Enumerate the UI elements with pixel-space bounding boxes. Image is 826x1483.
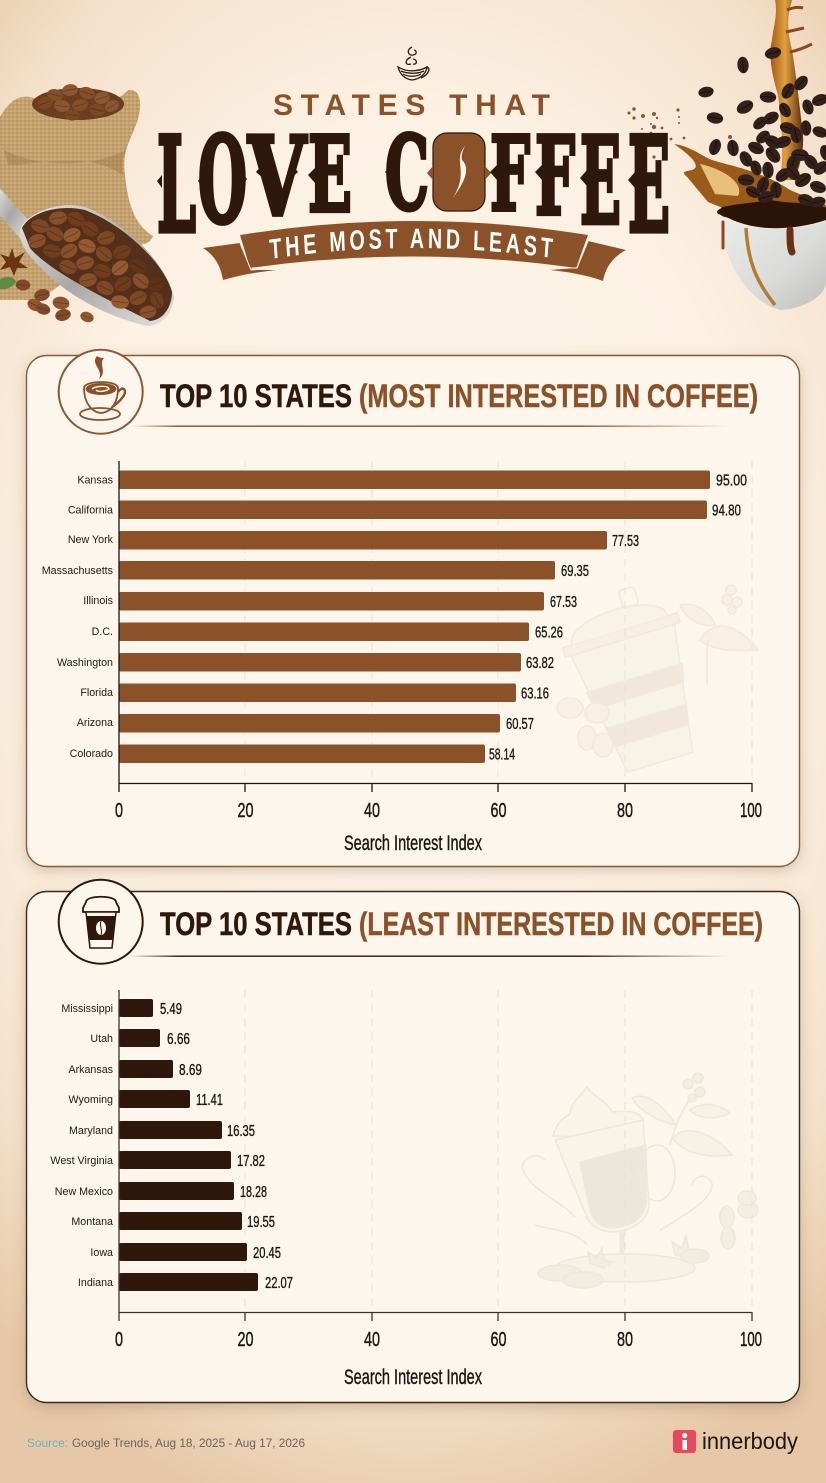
axis tick labels	[115, 800, 762, 822]
watermark: latte glass	[523, 1073, 758, 1288]
bars	[119, 999, 258, 1291]
state labels: New York	[68, 534, 114, 546]
value labels: 94.80	[712, 502, 741, 520]
panel: most interested states	[26, 350, 800, 866]
axis tick labels: 0	[115, 800, 123, 822]
illustration: burlap sack of coffee beans	[0, 83, 153, 300]
value labels: 95.00	[716, 472, 747, 490]
title: LOVE COFFEE: E	[308, 114, 352, 236]
axis tick labels: 100	[740, 1329, 762, 1351]
state labels: Indiana	[78, 1277, 113, 1289]
title: LOVE COFFEE: E	[628, 110, 670, 262]
heading: least interested	[160, 906, 763, 942]
source note: Google Trends, Aug 18, 2025 - Aug 17, 2026	[72, 1438, 305, 1450]
heading: most interested	[160, 378, 758, 414]
title: LOVE COFFEE: F	[490, 114, 530, 234]
state labels: West Virginia	[50, 1155, 113, 1167]
value labels: 18.28	[240, 1184, 267, 1201]
value labels: 5.49	[160, 1001, 182, 1018]
axis title: Search Interest Index	[344, 1366, 482, 1389]
value labels: 20.45	[253, 1245, 281, 1262]
state labels: Washington	[57, 657, 113, 669]
grid lines	[245, 461, 752, 783]
axis tick labels: 60	[490, 1329, 506, 1351]
state labels: New Mexico	[55, 1186, 113, 1198]
state labels: Arizona	[77, 717, 113, 729]
axis tick labels: 0	[115, 1329, 123, 1351]
state labels: Maryland	[69, 1125, 113, 1137]
heading underline	[130, 956, 730, 957]
value labels: 11.41	[196, 1092, 223, 1109]
title: LOVE COFFEE: O	[436, 115, 482, 233]
heading: most interested: TOP 10 STATES	[160, 378, 352, 414]
title: LOVE COFFEE: O	[198, 110, 247, 250]
illustration: loose beans, star anise and leaf	[0, 248, 95, 324]
axis tick labels: 100	[740, 800, 762, 822]
title: LOVE COFFEE: L	[157, 110, 196, 262]
grid lines	[245, 990, 752, 1312]
axes	[118, 461, 752, 792]
title: LOVE COFFEE: V	[247, 113, 307, 241]
state labels: Wyoming	[69, 1094, 113, 1106]
value labels	[160, 1001, 293, 1292]
value labels: 77.53	[612, 533, 639, 550]
state labels	[42, 474, 114, 760]
state labels: Colorado	[70, 748, 113, 760]
bars	[119, 470, 710, 763]
state labels: Mississippi	[61, 1003, 113, 1015]
decoration: speed lines beside heading	[190, 99, 635, 109]
panel: least interested states	[26, 880, 800, 1402]
value labels: 8.69	[179, 1062, 202, 1079]
watermark: takeaway coffee cup	[551, 576, 758, 780]
value labels	[489, 472, 747, 764]
value labels: 6.66	[167, 1031, 190, 1048]
icon: steaming cup emblem	[398, 47, 429, 80]
value labels: 60.57	[506, 716, 534, 733]
logo: innerbody: innerbody	[702, 1428, 798, 1454]
axis tick labels: 80	[617, 800, 633, 822]
axis tick labels	[115, 1329, 762, 1351]
title: LOVE COFFEE: F	[535, 112, 575, 240]
axis tick labels: 20	[238, 1329, 254, 1351]
source note: Source:	[27, 1438, 68, 1450]
title: LOVE COFFEE	[157, 110, 670, 262]
value labels: 63.16	[521, 686, 549, 702]
icon: coffee cup with steam	[59, 350, 143, 434]
state labels: California	[68, 504, 113, 516]
value labels: 22.07	[265, 1275, 293, 1292]
axis tick labels: 20	[238, 800, 254, 822]
value labels: 65.26	[535, 624, 563, 642]
value labels: 69.35	[561, 563, 589, 580]
axis title: Search Interest Index	[344, 832, 482, 855]
illustration: metal scoop of coffee beans	[0, 184, 174, 326]
state labels: Utah	[90, 1033, 113, 1045]
state labels: Arkansas	[68, 1064, 113, 1076]
axis tick labels: 40	[364, 800, 380, 822]
decoration: coffee speckles	[628, 107, 732, 159]
axis tick labels: 40	[364, 1329, 380, 1351]
illustration: coffee cup with splash and flying beans	[674, 0, 826, 310]
axis tick labels: 80	[617, 1329, 633, 1351]
state labels: Illinois	[83, 595, 113, 607]
state labels: Massachusetts	[42, 565, 113, 577]
heading underline	[130, 426, 730, 427]
value labels: 17.82	[237, 1153, 265, 1170]
axes	[118, 990, 752, 1321]
heading: STATES THAT: STATES THAT	[273, 89, 550, 122]
value labels: 67.53	[550, 594, 577, 611]
state labels: Kansas	[77, 474, 113, 486]
axis tick labels: 60	[490, 800, 506, 822]
title: LOVE COFFEE: C	[385, 113, 429, 233]
title: LOVE COFFEE: E	[580, 111, 621, 252]
ribbon: THE MOST AND LEAST	[203, 221, 626, 281]
value labels: 63.82	[526, 655, 554, 672]
value labels: 19.55	[247, 1214, 275, 1231]
state labels: Montana	[71, 1216, 113, 1228]
value labels: 16.35	[227, 1123, 255, 1140]
state labels: Iowa	[90, 1247, 113, 1259]
state labels	[50, 1003, 113, 1289]
ribbon: THE MOST AND LEAST: THE MOST AND LEAST	[269, 228, 554, 258]
state labels: Florida	[80, 687, 113, 699]
value labels: 58.14	[489, 746, 515, 764]
state labels: D.C.	[92, 626, 113, 638]
icon: takeaway cup	[59, 880, 143, 964]
heading: least interested: TOP 10 STATES	[160, 906, 352, 942]
